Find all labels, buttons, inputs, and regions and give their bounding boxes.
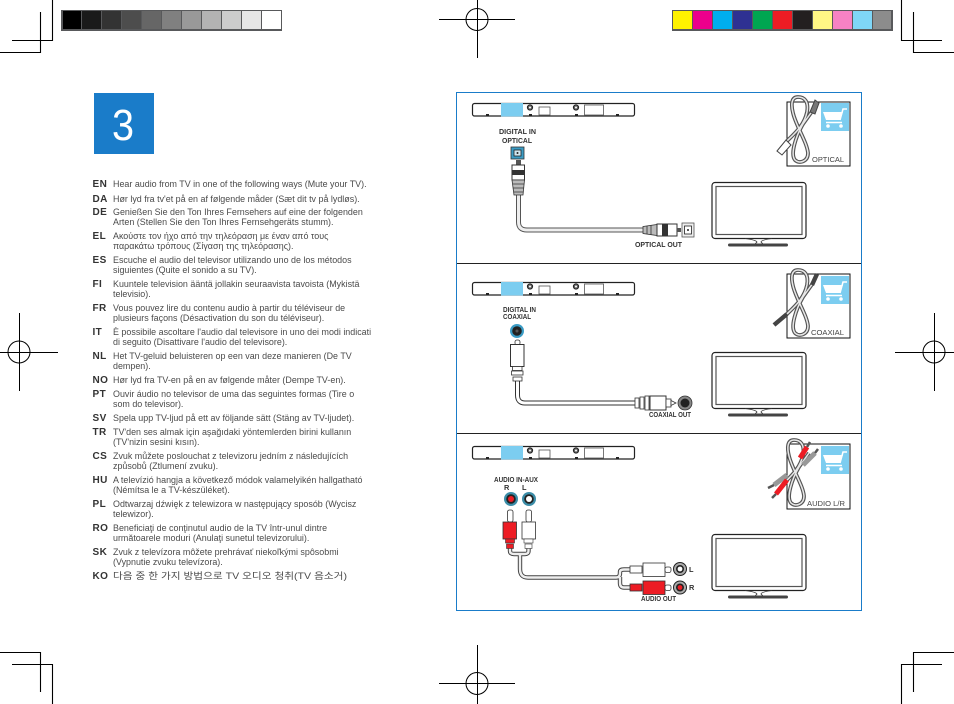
grayscale calibration bar: [61, 10, 282, 31]
label: audio in-aux: R: [504, 483, 510, 492]
language instructions text block: telewizor).: [113, 509, 154, 519]
label: audio out: AUDIO OUT: [641, 594, 676, 603]
step number badge: 3: [112, 100, 134, 149]
language instructions text block: SK: [92, 547, 108, 558]
accessory box: audio cable: AUDIO L/R: [807, 499, 846, 508]
language instructions text block: următoarele moduri (Anulaţi sunetul televizorului).: [113, 533, 309, 543]
language instructions text block: Ouvir áudio no televisor de uma das seguintes formas (Tire o: [113, 389, 354, 399]
language instructions text block: siguientes (Quite el sonido a su TV).: [113, 265, 257, 275]
accessory box: audio cable: [768, 440, 850, 509]
coaxial port on soundbar: [510, 324, 524, 338]
language instructions text block: FR: [92, 303, 107, 314]
language instructions text block: Kuuntele television ääntä jollakin seuraavista tavoista (Mykistä: [113, 279, 360, 289]
language instructions text block: som do televisor).: [113, 399, 183, 409]
language instructions text block: HU: [92, 475, 108, 486]
label: optical out: OPTICAL OUT: [635, 240, 682, 249]
accessory box: coaxial cable: [774, 270, 850, 338]
language instructions text block: způsobů (Ztlumení zvuku).: [113, 461, 218, 471]
accessory box: optical cable: OPTICAL: [812, 155, 844, 164]
soundbar rear: [472, 446, 634, 460]
coaxial out port: [678, 396, 692, 410]
language instructions text block: PL: [92, 499, 106, 510]
language instructions text block: dempen).: [113, 361, 151, 371]
language instructions text block: IT: [92, 327, 102, 338]
language instructions text block: (TV'nizin sesini kısın).: [113, 437, 199, 447]
language instructions text block: CS: [92, 451, 107, 462]
language instructions text block: 다음 중 한 가지 방법으로 TV 오디오 청취(TV 음소거): [113, 571, 347, 581]
audio out ports: L: [689, 565, 694, 574]
language instructions text block: Hear audio from TV in one of the following ways (Mute your TV).: [113, 179, 367, 189]
label: digital in coaxial: DIGITAL IN: [503, 305, 536, 314]
language instructions text block: Zvuk z televízora môžete prehrávať niekoľkými spôsobmi: [113, 547, 339, 557]
language instructions text block: Beneficiaţi de conţinutul audio de la TV într-unul dintre: [113, 523, 327, 533]
label: digital in optical: DIGITAL IN: [499, 127, 536, 136]
language instructions text block: EL: [92, 231, 106, 242]
language instructions text block: (Vypnutie zvuku televízora).: [113, 557, 223, 567]
optical port on soundbar: [511, 147, 524, 159]
language instructions text block: NO: [92, 375, 108, 386]
language instructions text block: (Némítsa le a TV-készüléket).: [113, 485, 230, 495]
label: coaxial out: COAXIAL OUT: [649, 410, 691, 419]
language instructions text block: plusieurs façons (Désactivation du son du téléviseur).: [113, 313, 324, 323]
audio in ports: [504, 492, 536, 506]
language instructions text block: RO: [92, 523, 108, 534]
language instructions text block: Arten (Stellen Sie den Ton Ihres Fernsehgeräts stumm).: [113, 217, 334, 227]
language instructions text block: TR: [92, 427, 107, 438]
language instructions text block: FI: [92, 279, 102, 290]
step number badge: [94, 93, 154, 154]
language instructions text block: Zvuk můžete poslouchat z televizoru jedním z následujících: [113, 451, 348, 461]
label: audio in-aux: L: [522, 483, 527, 492]
language instructions text block: Escuche el audio del televisor utilizando uno de los métodos: [113, 255, 352, 265]
panel: audio L/R connection: [472, 440, 850, 603]
language instructions text block: παρακάτω τρόπους (Σίγαση της τηλεόρασης).: [113, 241, 293, 251]
label: digital in optical: OPTICAL: [502, 136, 532, 145]
language instructions text block: Hør lyd fra tv'et på en af følgende måder (Sæt dit tv på lydløs).: [113, 194, 360, 204]
language instructions text block: di seguito (Disattivare l'audio del televisore).: [113, 337, 287, 347]
panel: optical connection: [472, 97, 850, 249]
optical cable: [512, 160, 681, 236]
language instructions text block: NL: [92, 351, 107, 362]
language instructions text block: Hør lyd fra TV-en på en av følgende måter (Dempe TV-en).: [113, 375, 346, 385]
diagram frame: [456, 92, 862, 610]
language instructions text block: A televízió hangja a következő módok valamelyikén hallgatható: [113, 475, 362, 485]
language instructions text block: Genießen Sie den Ton Ihres Fernsehers auf eine der folgenden: [113, 207, 363, 217]
accessory box: optical cable: [777, 97, 850, 166]
television: [712, 534, 806, 598]
language instructions text block: [92, 179, 371, 582]
language instructions text block: TV'den ses almak için aşağıdaki yöntemlerden birini kullanın: [113, 427, 351, 437]
language instructions text block: Ακούστε τον ήχο από την τηλεόραση με έναν από τους: [113, 231, 329, 241]
panel: coaxial connection: [472, 270, 850, 419]
language instructions text block: Het TV-geluid beluisteren op een van deze manieren (De TV: [113, 351, 353, 361]
language instructions text block: televisio).: [113, 289, 151, 299]
language instructions text block: ES: [92, 255, 107, 266]
language instructions text block: DA: [92, 194, 108, 205]
language instructions text block: PT: [92, 389, 106, 400]
language instructions text block: Spela upp TV-ljud på ett av följande sätt (Stäng av TV-ljudet).: [113, 413, 354, 423]
RCA cable: [503, 510, 671, 594]
coaxial cable: [510, 340, 676, 410]
language instructions text block: È possibile ascoltare l'audio dal televisore in uno dei modi indicati: [113, 327, 371, 337]
television: [712, 352, 806, 416]
label: digital in coaxial: [503, 305, 536, 321]
label: digital in coaxial: COAXIAL: [503, 312, 531, 321]
optical out port: [682, 223, 694, 237]
label: audio in-aux: [494, 475, 538, 492]
language instructions text block: SV: [92, 413, 107, 424]
label: digital in optical: [499, 127, 536, 145]
language instructions text block: Odtwarzaj dźwięk z telewizora w następujący sposób (Wycisz: [113, 499, 357, 509]
accessory box: coaxial cable: COAXIAL: [811, 328, 844, 337]
soundbar rear: [472, 282, 634, 296]
language instructions text block: DE: [92, 207, 107, 218]
language instructions text block: Vous pouvez lire du contenu audio à partir du téléviseur de: [113, 303, 345, 313]
colour calibration bar: [672, 10, 893, 31]
soundbar rear: [472, 103, 634, 116]
audio out ports: [674, 562, 695, 594]
language instructions text block: KO: [92, 571, 108, 582]
label: audio in-aux: AUDIO IN-AUX: [494, 475, 538, 484]
language instructions text block: EN: [92, 179, 107, 190]
audio out ports: R: [689, 583, 695, 592]
television: [712, 182, 806, 246]
